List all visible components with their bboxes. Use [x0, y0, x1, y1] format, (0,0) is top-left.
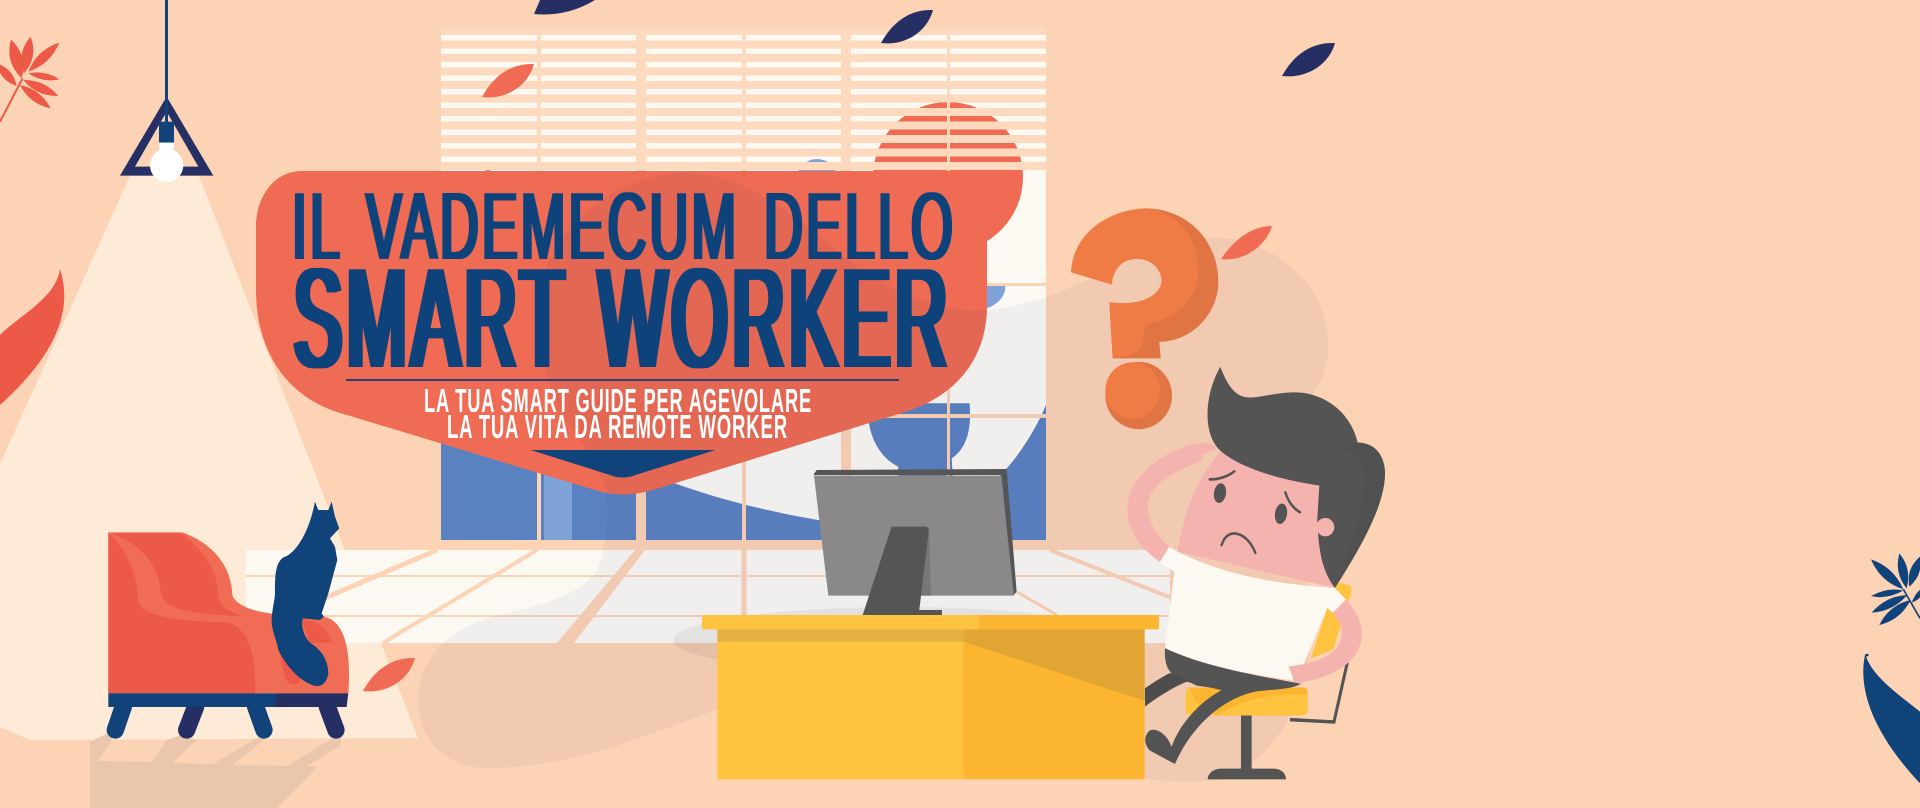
leaf: right navy [1863, 654, 1920, 783]
floor shadow of sofa [90, 732, 341, 808]
raised arm [1127, 443, 1217, 562]
eyes [1212, 482, 1289, 525]
banner arrow [531, 450, 716, 477]
leaf: top navy [534, 0, 595, 14]
leaf: top right navy [1282, 43, 1335, 76]
leaf: window navy [881, 10, 933, 43]
monitor [813, 469, 1017, 615]
character at chair [1127, 367, 1385, 779]
floor light patch [246, 550, 1172, 643]
hair [1208, 367, 1385, 588]
leaf: red near question mark [1221, 226, 1272, 259]
blinds [441, 27, 1046, 170]
chair post and base [1208, 715, 1286, 779]
desk [702, 615, 1159, 779]
sofa body [108, 532, 349, 693]
sun [873, 102, 1023, 252]
seat shadow [1188, 688, 1308, 715]
window [441, 27, 1046, 550]
lower arm [1288, 599, 1362, 683]
icon: hanging lamp [120, 0, 213, 182]
leaf: left red [0, 269, 64, 405]
blue landscape [441, 380, 1046, 540]
banner shape [256, 171, 987, 494]
leaf: window red [482, 64, 534, 97]
icon: red plant [0, 37, 59, 122]
icon: question mark [1071, 208, 1218, 429]
brows and mouth [1210, 471, 1300, 553]
blue tree [868, 403, 970, 487]
light blue strip [544, 475, 572, 540]
large shadow blob [418, 173, 1328, 782]
trousers and near leg [1145, 648, 1301, 764]
blue bumps behind banner [480, 159, 1005, 309]
banner title line 2: SMART WORKER [294, 239, 952, 398]
chair seat [1186, 688, 1308, 715]
chair back strut [1290, 663, 1347, 722]
sofa [108, 532, 349, 730]
chair back [1311, 582, 1352, 659]
cat [272, 502, 339, 686]
lamp light cone [0, 176, 418, 740]
subtitle [424, 382, 812, 445]
shirt [1160, 547, 1346, 681]
sofa dark panels [108, 532, 332, 693]
title underline [346, 379, 899, 381]
far leg [1145, 673, 1240, 707]
leaf: red near sofa [363, 658, 415, 691]
sofa legs [115, 707, 336, 730]
desk shadow [673, 607, 1127, 673]
ear [1316, 518, 1334, 536]
banner title line 1: IL VADEMECUM DELLO [292, 173, 956, 280]
sofa base [108, 693, 277, 707]
icon: blue plant [1871, 553, 1920, 625]
subtitle: LA TUA VITA DA REMOTE WORKER [447, 408, 788, 445]
subtitle: LA TUA SMART GUIDE PER AGEVOLARE [424, 382, 812, 419]
face [1178, 450, 1335, 588]
window frame bars [441, 170, 1046, 550]
hair shade [1335, 443, 1385, 588]
